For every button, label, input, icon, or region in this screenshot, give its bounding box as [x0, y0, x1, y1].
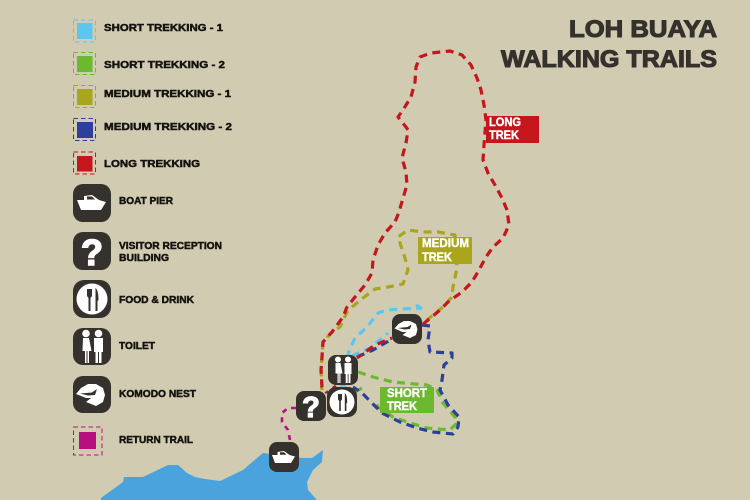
legend: medium trekking 1: [74, 86, 231, 108]
label: long trek: TREK: [489, 130, 520, 142]
legend: visitor reception building: BUILDING: [119, 252, 169, 264]
legend: boat pier: BOAT PIER: [119, 195, 173, 207]
label: medium trek: [418, 237, 472, 264]
legend: return trail: RETURN TRAIL: [119, 434, 194, 446]
legend: short trekking 1: SHORT TREKKING - 1: [104, 22, 223, 34]
legend: komodo nest: KOMODO NEST: [119, 388, 197, 400]
legend: toilet: [73, 328, 156, 365]
title: LOH BUAYA: [569, 16, 717, 43]
map icon: food and drink: [327, 387, 357, 417]
legend: boat pier: [73, 184, 173, 222]
map icon: boat pier: [269, 442, 299, 472]
label: short trek: TREK: [387, 401, 418, 413]
label: medium trek: MEDIUM: [422, 238, 469, 250]
trail: medium trekking 2: [353, 325, 459, 434]
map icon: visitor reception: [296, 391, 326, 424]
trail: short trekking 2: [355, 372, 457, 430]
label: long trek: [486, 116, 539, 143]
legend: short trekking 2: SHORT TREKKING - 2: [104, 59, 225, 71]
legend: medium trekking 2: MEDIUM TREKKING - 2: [104, 121, 232, 133]
legend: medium trekking 1: MEDIUM TREKKING - 1: [104, 88, 231, 100]
legend: short trekking 2: [74, 52, 225, 74]
trail: long trekking: [321, 51, 509, 393]
legend: long trekking: LONG TREKKING: [104, 158, 200, 170]
legend: visitor reception building: VISITOR RECEPTION: [119, 240, 222, 252]
legend: medium trekking 2: [74, 118, 232, 140]
legend: visitor reception building: ?: [81, 232, 103, 273]
map icon: visitor reception: ?: [302, 392, 320, 424]
legend: toilet: TOILET: [119, 340, 156, 352]
title: WALKING TRAILS: [501, 46, 717, 73]
legend: food and drink: FOOD & DRINK: [119, 294, 194, 306]
label: long trek: LONG: [489, 117, 521, 129]
water: bay: [101, 450, 323, 500]
label: short trek: [380, 387, 434, 413]
legend: visitor reception building: [73, 232, 222, 273]
legend: return trail: [74, 427, 194, 455]
label: medium trek: TREK: [422, 252, 453, 264]
legend: short trekking 1: [74, 20, 223, 42]
legend: food and drink: [73, 280, 194, 318]
trail: return trail: [282, 408, 296, 440]
map icon: toilet: [328, 355, 358, 385]
legend: long trekking: [74, 152, 200, 174]
label: short trek: SHORT: [387, 388, 427, 400]
trail: short trekking 1: [340, 305, 421, 385]
legend: komodo nest: [73, 376, 197, 413]
map icon: komodo nest: [392, 314, 422, 344]
title: [501, 16, 717, 73]
trail: medium trekking 1: [321, 230, 457, 390]
